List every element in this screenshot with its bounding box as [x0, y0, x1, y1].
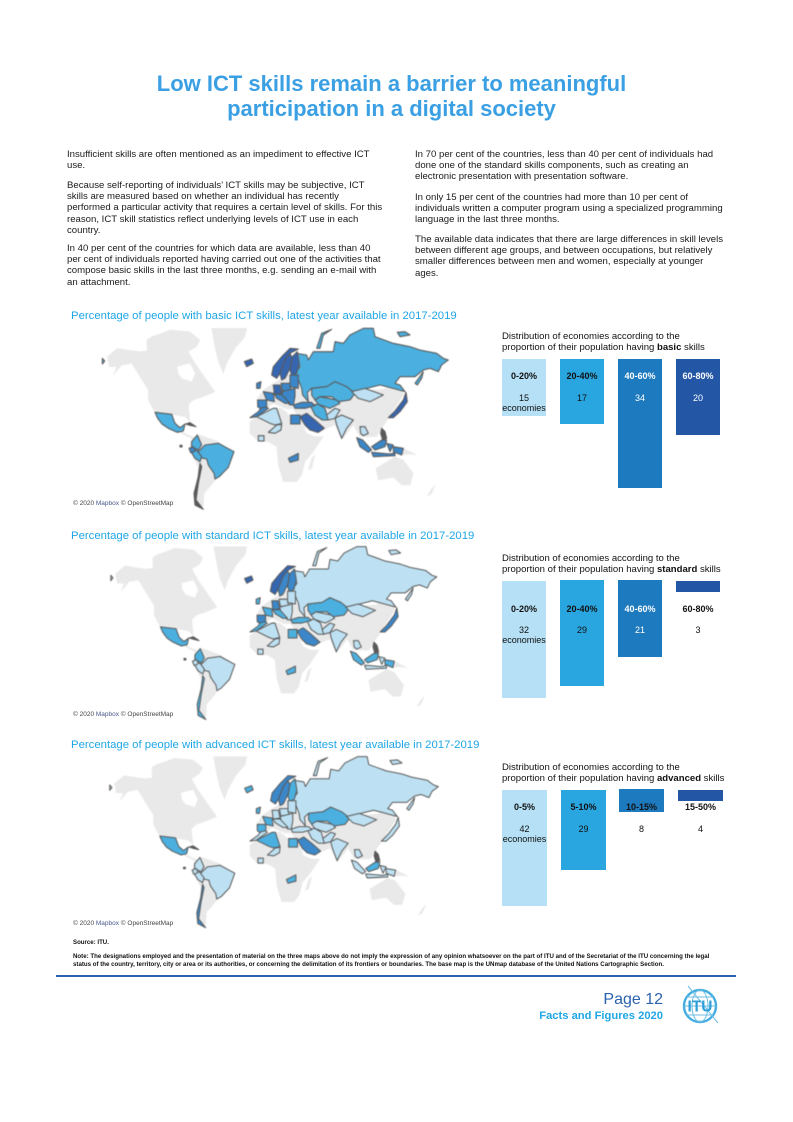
- bar: 40-60%: 40-60%: [624, 604, 656, 614]
- bar: 15-50%: 15-50%: [685, 802, 716, 812]
- chart heading: proportion of their population having advanced skills: [502, 773, 724, 784]
- chart heading: Distribution of economies according to the: [502, 762, 680, 773]
- bar: 20-40%: 20-40%: [566, 371, 598, 381]
- text block: left column: per cent of individuals reported having carried out one of the activities that: [67, 254, 381, 265]
- text block: left column: Because self-reporting of individuals’ ICT skills may be subjective, ICT: [67, 180, 365, 191]
- page number: Page 12: [603, 991, 663, 1008]
- bar: 20-40%: [560, 359, 604, 424]
- bar: 40-60%: [618, 359, 662, 488]
- bar: 0-20%: 0-20%: [511, 604, 537, 614]
- bar: 40-60%: 21: [635, 625, 645, 635]
- bar: 60-80%: [676, 359, 720, 435]
- bar: 60-80%: 60-80%: [682, 604, 714, 614]
- note text: [73, 953, 709, 968]
- bar: 20-40%: [560, 580, 604, 686]
- map: basic ICT skills: [101, 327, 450, 510]
- text block: left column: [67, 149, 382, 288]
- map: advanced ICT skills: [108, 755, 440, 929]
- text block: right column: The available data indicates that there are large differences in skill levels: [415, 234, 723, 245]
- bar: 20-40%: 20-40%: [566, 604, 598, 614]
- chart heading: Distribution of economies according to the: [502, 553, 680, 564]
- heading: standard skills map: Percentage of people with standard ICT skills, latest year available in 2017-2019: [71, 530, 474, 542]
- icon: ITU logo: [682, 986, 718, 1024]
- text block: right column: In 70 per cent of the countries, less than 40 per cent of individuals had: [415, 149, 713, 160]
- text block: right column: electronic presentation with presentation software.: [415, 171, 628, 182]
- bar: 0-20%: [502, 581, 546, 698]
- bar: 20-40%: 17: [577, 393, 587, 403]
- chart heading: [502, 762, 724, 784]
- bar: 0-20%: [502, 359, 546, 416]
- map attribution: © 2020 Mapbox © OpenStreetMap: [73, 920, 173, 927]
- icon: ITU logo: ITU: [688, 998, 712, 1016]
- heading: basic skills map: Percentage of people with basic ICT skills, latest year available in 2017-2019: [71, 310, 457, 322]
- chart heading: Distribution of economies according to the: [502, 331, 680, 342]
- bar: 0-5%: [502, 790, 547, 906]
- bar: 0-20%: economies: [502, 635, 546, 645]
- text block: left column: country.: [67, 225, 100, 236]
- bar: 20-40%: 29: [577, 625, 587, 635]
- text block: right column: done one of the standard skills components, such as creating an: [415, 160, 689, 171]
- text block: left column: Insufficient skills are often mentioned as an impediment to effective ICT: [67, 149, 370, 160]
- title: participation in a digital society: [227, 96, 556, 121]
- text block: left column: skills are measured based on whether an individual has recently: [67, 191, 339, 202]
- chart heading: [502, 331, 705, 353]
- bar chart: standard skills distribution: [502, 553, 721, 698]
- text block: right column: between different age groups, and between occupations, but relatively: [415, 245, 712, 256]
- text block: right column: smaller differences between men and women, especially at younger: [415, 256, 703, 267]
- text block: right column: individuals written a computer program using a specialized programming: [415, 203, 723, 214]
- text block: left column: reason, ICT skill statistics reflect underlying levels of ICT use in each: [67, 214, 358, 225]
- note text: Note: The designations employed and the presentation of material on the three maps above do not imply the expression of any opinion whatsoever on the part of ITU and of the Secretariat of the ITU concerning the legal: [73, 953, 709, 960]
- bar: 10-15%: [619, 789, 664, 834]
- bar: 40-60%: [618, 580, 662, 657]
- text block: left column: an attachment.: [67, 277, 130, 288]
- chart heading: proportion of their population having standard skills: [502, 564, 721, 575]
- bar: 60-80%: 3: [695, 625, 700, 635]
- map: standard ICT skills: [110, 545, 438, 720]
- chart heading: proportion of their population having basic skills: [502, 342, 705, 353]
- text block: right column: ages.: [415, 268, 438, 279]
- text block: left column: performed a particular activity that requires a certain level of skills. For this: [67, 202, 382, 213]
- bar: 0-5%: economies: [503, 834, 546, 844]
- bar: 15-50%: 4: [698, 824, 703, 834]
- source line: Source: ITU.: [73, 939, 109, 946]
- text block: left column: In 40 per cent of the countries for which data are available, less than 40: [67, 243, 370, 254]
- bar: 15-50%: [678, 790, 723, 834]
- text block: left column: compose basic skills in the last three months, e.g. sending an e-mail with: [67, 265, 376, 276]
- text block: left column: use.: [67, 160, 85, 171]
- bar: 5-10%: 29: [578, 824, 588, 834]
- bar: 0-20%: economies: [502, 403, 546, 413]
- chart heading: [502, 553, 721, 575]
- bar: 0-20%: 0-20%: [511, 371, 537, 381]
- bar: 40-60%: 34: [635, 393, 645, 403]
- bar: 60-80%: 60-80%: [682, 371, 714, 381]
- text block: right column: In only 15 per cent of the countries had more than 10 per cent of: [415, 192, 688, 203]
- title: Low ICT skills remain a barrier to meaningful: [157, 71, 626, 96]
- bar: 0-5%: 0-5%: [514, 802, 535, 812]
- bar chart: basic skills distribution: [502, 331, 720, 488]
- bar: 60-80%: 20: [693, 393, 703, 403]
- title: [157, 71, 626, 121]
- map attribution: © 2020 Mapbox © OpenStreetMap: [73, 500, 173, 507]
- bar: 0-20%: 32: [519, 625, 529, 635]
- bar: 40-60%: 40-60%: [624, 371, 656, 381]
- bar: 0-20%: 15: [519, 393, 529, 403]
- bar: 5-10%: [561, 790, 606, 870]
- bar: 10-15%: 8: [639, 824, 644, 834]
- bar: 60-80%: [676, 581, 720, 635]
- bar: 5-10%: 5-10%: [570, 802, 596, 812]
- bar: 0-5%: 42: [519, 824, 530, 834]
- bar chart: advanced skills distribution: [502, 762, 724, 906]
- footer publication name: Facts and Figures 2020: [539, 1010, 663, 1022]
- note text: status of the country, territory, city or area or its authorities, or concerning the delimitation of its frontiers or boundaries. The base map is the UNmap database of the United Nations Cartographic Section.: [73, 961, 664, 968]
- footer rule: [56, 975, 736, 976]
- bar: 10-15%: 10-15%: [626, 802, 657, 812]
- map attribution: © 2020 Mapbox © OpenStreetMap: [73, 711, 173, 718]
- text block: right column: language in the last three months.: [415, 214, 560, 225]
- text block: right column: [415, 149, 723, 279]
- heading: advanced skills map: Percentage of people with advanced ICT skills, latest year available in 2017-2019: [71, 739, 479, 751]
